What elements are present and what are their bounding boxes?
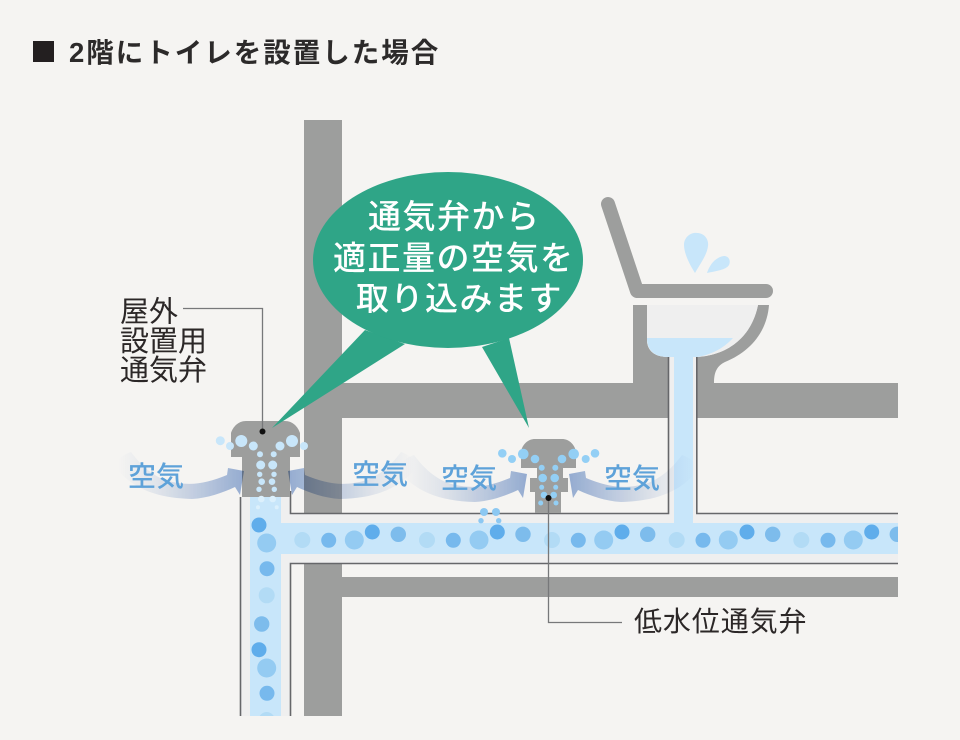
arrow: air into outdoor vent from right — [288, 452, 417, 499]
icon: water drops — [684, 233, 730, 273]
air labels — [128, 459, 660, 494]
balloon text — [333, 198, 574, 317]
water bubbles: horizontal pipe — [294, 524, 905, 550]
building structure: wall and floors — [304, 120, 898, 716]
label: outdoor vent valve: 屋外 — [120, 296, 178, 328]
pipe water — [250, 340, 898, 716]
toilet lid and seat — [608, 204, 766, 291]
toilet bowl — [633, 305, 769, 383]
bowl water — [647, 338, 733, 357]
air labels: 空気 — [604, 463, 660, 494]
label: outdoor vent valve: 設置用 — [120, 326, 207, 358]
pipe outlines — [240, 357, 898, 716]
outdoor vent valve — [216, 421, 308, 509]
balloon text: 通気弁から — [368, 198, 540, 235]
low water level vent valve — [498, 439, 599, 513]
arrow: air into low vent from left — [398, 455, 527, 502]
rising bubbles above pipe — [478, 508, 501, 523]
arrow: air into low vent from right — [569, 455, 698, 502]
label: outdoor vent valve — [120, 296, 266, 434]
air bubbles — [216, 435, 308, 492]
speech balloon — [272, 172, 583, 428]
title: 2階にトイレを設置した場合 — [69, 37, 440, 68]
air bubbles — [498, 449, 599, 506]
label: low water level vent valve — [546, 495, 807, 637]
air labels: 空気 — [128, 461, 184, 492]
balloon text: 適正量の空気を — [333, 240, 574, 276]
label: low water level vent valve: 低水位通気弁 — [634, 606, 807, 637]
air labels: 空気 — [441, 463, 497, 494]
drain pipes — [240, 340, 898, 716]
air labels: 空気 — [352, 459, 408, 490]
label: outdoor vent valve: 通気弁 — [120, 354, 207, 387]
balloon text: 取り込みます — [356, 280, 563, 317]
water bubbles: vertical pipe — [252, 518, 276, 728]
pipe body — [241, 357, 898, 716]
toilet — [608, 204, 769, 383]
arrow: air into outdoor vent from left — [115, 452, 244, 499]
